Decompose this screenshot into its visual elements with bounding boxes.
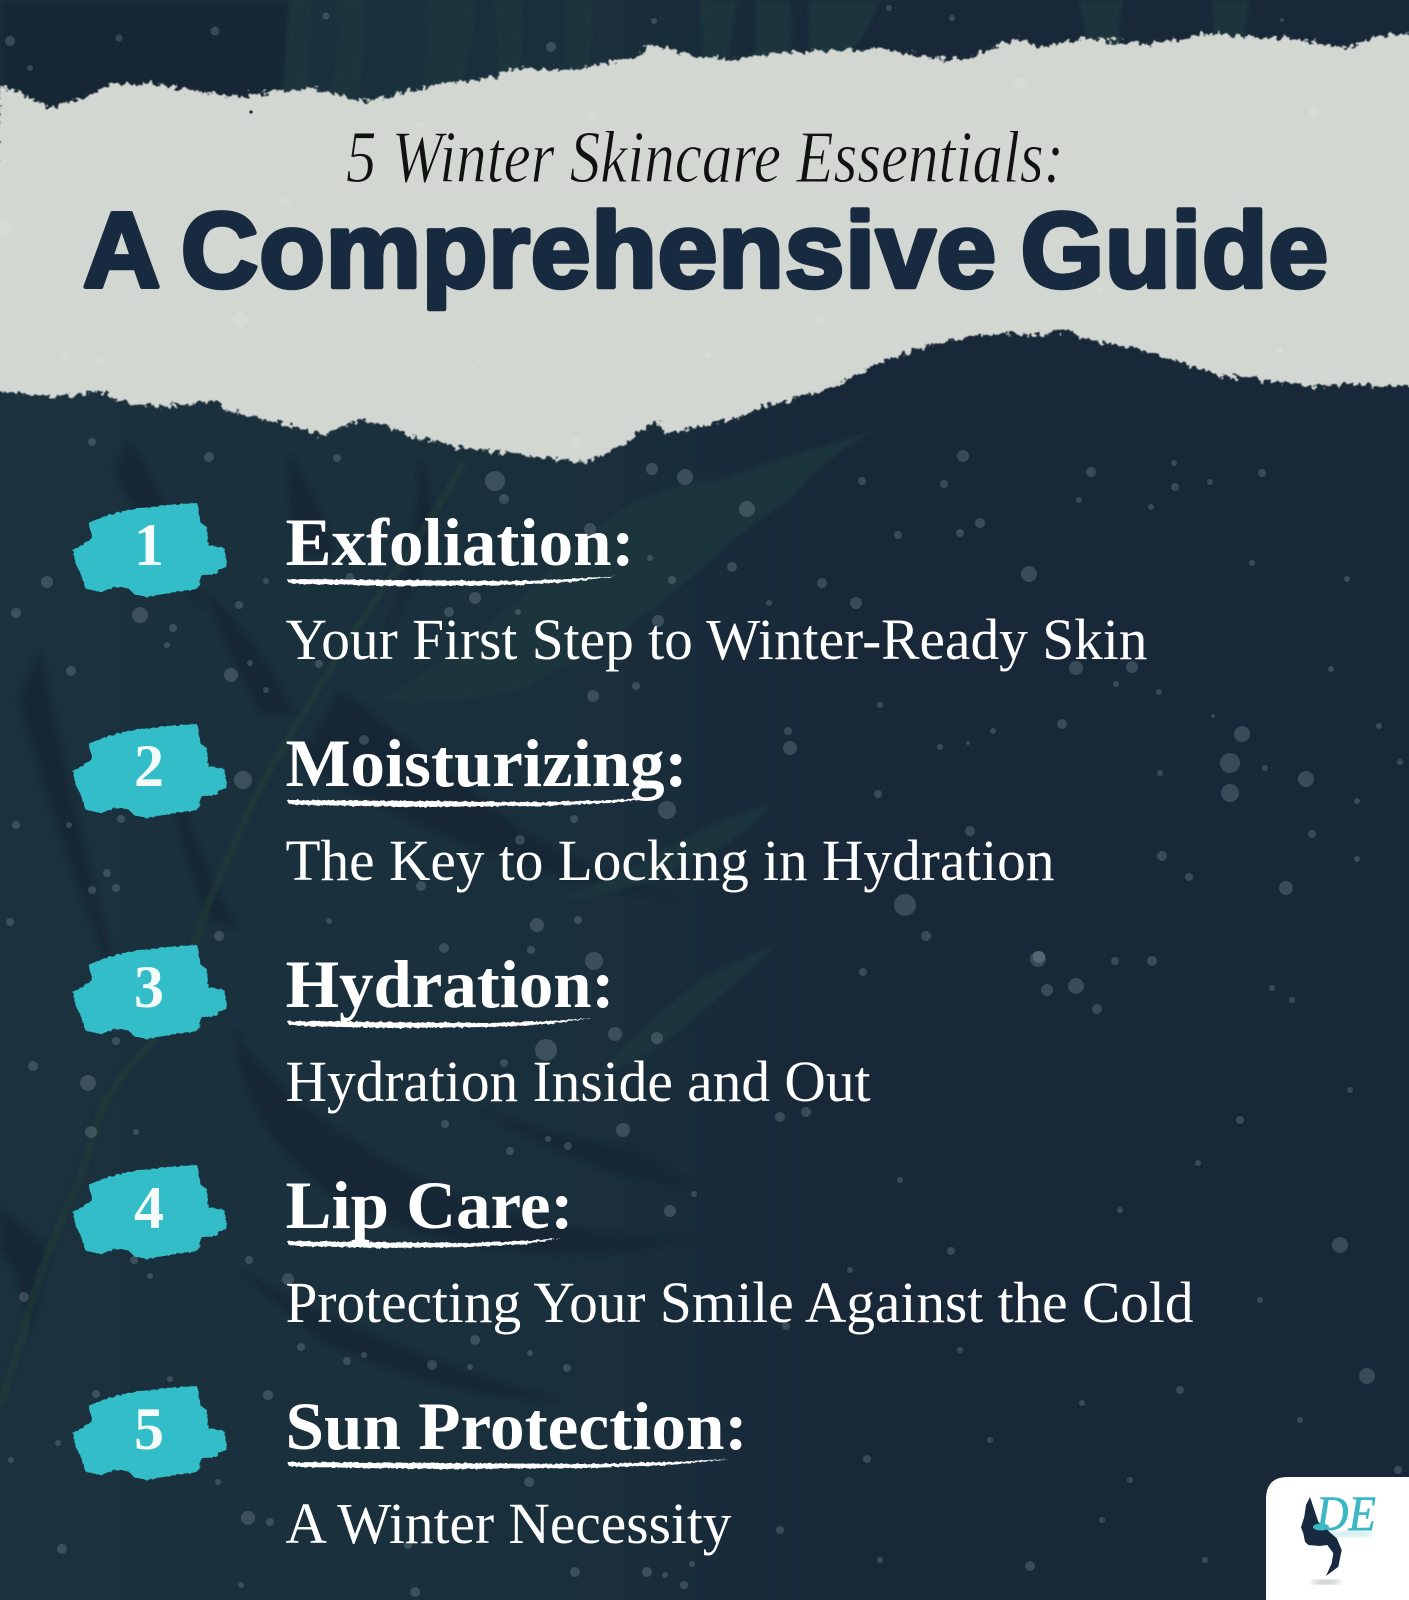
- underline 1: [287, 576, 616, 586]
- item 5: sun protection: [73, 1386, 748, 1556]
- logo teal accent: [1313, 1524, 1329, 1530]
- underline 5: [287, 1459, 730, 1469]
- underline 4: [287, 1238, 561, 1248]
- logo letters: DE: [1315, 1485, 1376, 1541]
- description 5: A Winter Necessity: [286, 1491, 732, 1556]
- badge 5: [73, 1386, 227, 1480]
- title: script subtitle: 5 Winter Skincare Essentials:: [346, 117, 1064, 199]
- logo face silhouette: [1301, 1497, 1342, 1576]
- torn paper banner: [0, 33, 1409, 463]
- description 2: The Key to Locking in Hydration: [286, 828, 1054, 893]
- badge 2: [73, 724, 227, 818]
- item 2: moisturizing: [73, 724, 1054, 893]
- description 3: Hydration Inside and Out: [286, 1049, 870, 1114]
- item 4: lip care: [73, 1165, 1194, 1335]
- logo reflection: [1326, 1531, 1374, 1537]
- badge 5: 5: [134, 1396, 164, 1462]
- heading 3: Hydration:: [286, 946, 614, 1022]
- underline 3: [287, 1018, 592, 1028]
- logo card: [1266, 1477, 1409, 1600]
- logo shadow: [1311, 1580, 1341, 1584]
- badge 1: [73, 503, 227, 597]
- description 1: Your First Step to Winter-Ready Skin: [286, 607, 1148, 672]
- title: main heading: A Comprehensive Guide: [83, 190, 1328, 310]
- heading 5: Sun Protection:: [286, 1388, 748, 1464]
- badge 4: [73, 1165, 227, 1259]
- item 3: hydration: [73, 945, 870, 1114]
- badge 2: 2: [134, 733, 164, 799]
- badge 4: 4: [134, 1175, 164, 1241]
- underline 2: [287, 797, 663, 807]
- heading 1: Exfoliation:: [286, 504, 634, 580]
- heading 4: Lip Care:: [286, 1167, 574, 1243]
- heading 2: Moisturizing:: [286, 725, 688, 801]
- badge 3: [73, 945, 227, 1039]
- badge 3: 3: [134, 954, 164, 1020]
- item 1: exfoliation: [73, 503, 1148, 672]
- badge 1: 1: [134, 512, 164, 578]
- description 4: Protecting Your Smile Against the Cold: [286, 1270, 1194, 1335]
